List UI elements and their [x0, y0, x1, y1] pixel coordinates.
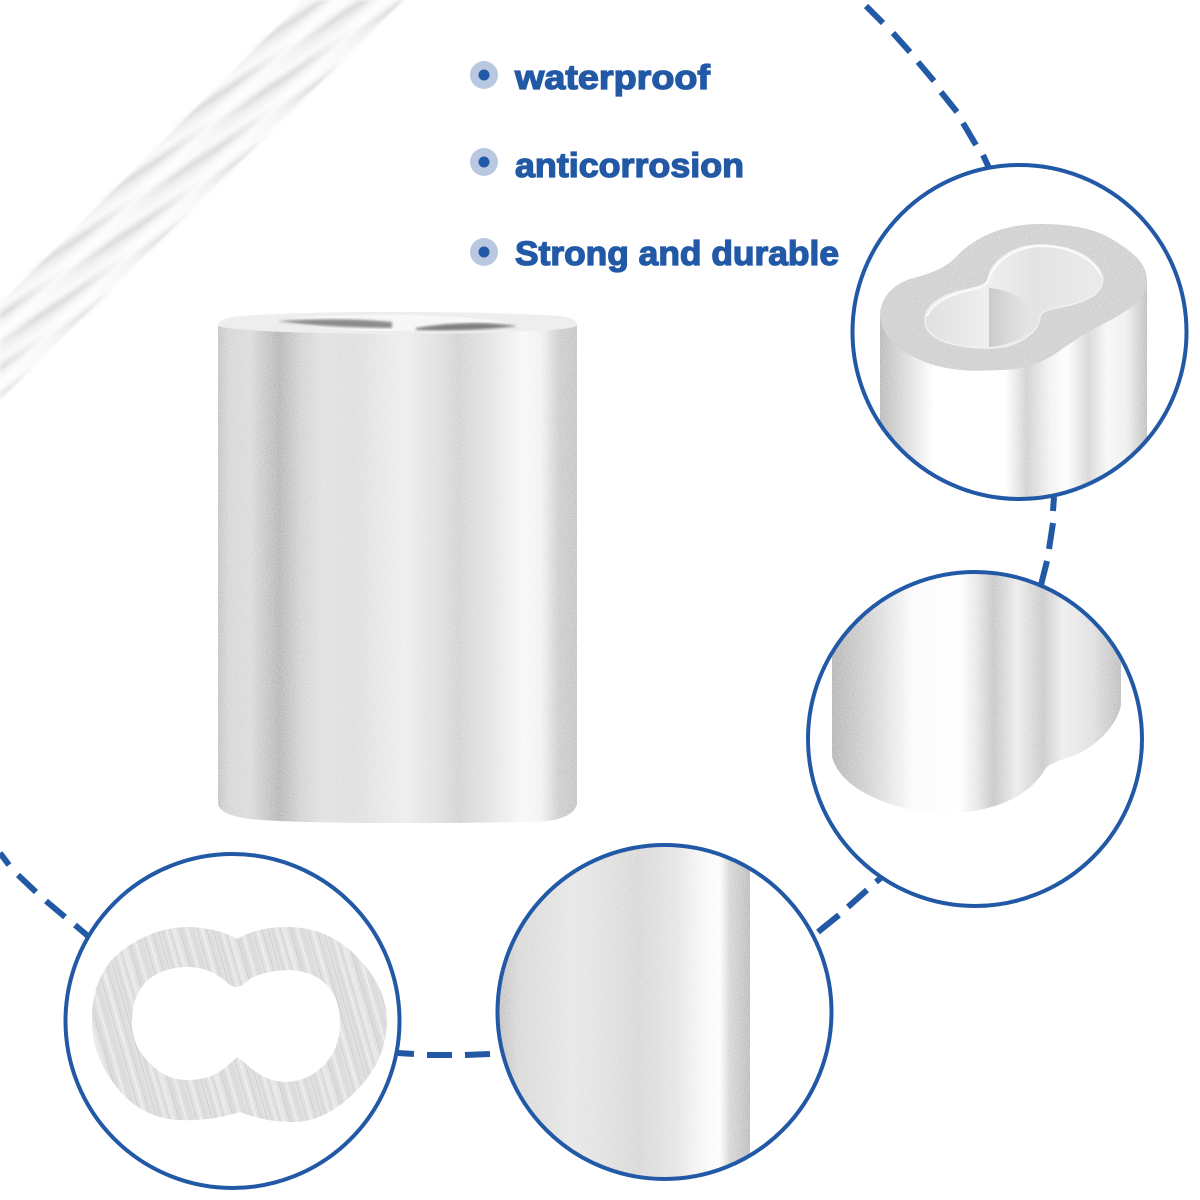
- sleeve body: [832, 560, 1121, 813]
- detail circle: sleeve bottom edge: [808, 560, 1142, 906]
- connector: right arc: [1041, 497, 1054, 585]
- sleeve surface: [497, 845, 750, 1179]
- text: waterproof: waterproof: [514, 59, 711, 97]
- detail circle: bore end view: [852, 165, 1186, 510]
- circle outline: [852, 165, 1186, 499]
- text: anticorrosion: anticorrosion: [515, 147, 744, 185]
- detail circle: sleeve surface: [497, 845, 832, 1179]
- brushed figure-eight washer: [92, 927, 387, 1122]
- connector: lower left arc: [0, 853, 89, 937]
- text: strong and durable: Strong and durable: [515, 235, 839, 273]
- main aluminium sleeve: [218, 312, 577, 823]
- bright bore edge: [927, 246, 1101, 316]
- bullet: waterproof: [470, 61, 498, 89]
- detail circle: cross-section: [66, 854, 400, 1188]
- wire rope cable: [0, 0, 420, 420]
- dashed connector ring: [0, 6, 1054, 1055]
- circle outline: [498, 845, 832, 1179]
- bullet: anticorrosion: [470, 148, 498, 176]
- sleeve body: [218, 326, 577, 823]
- circle outline: [808, 572, 1142, 906]
- connector: lower right arc: [818, 877, 882, 932]
- connector: top right arc: [866, 6, 989, 168]
- sleeve bore opening: [273, 315, 522, 331]
- figure-eight bore: [925, 245, 1103, 348]
- top face: [880, 224, 1147, 371]
- bullet: strong and durable: [470, 238, 498, 266]
- sleeve top rim: [218, 312, 577, 334]
- connector: bottom arc: [398, 1053, 490, 1055]
- circle outline: [66, 854, 400, 1188]
- feature list: [470, 59, 839, 273]
- sleeve body: [880, 282, 1147, 510]
- bore inner wall: [989, 288, 1018, 347]
